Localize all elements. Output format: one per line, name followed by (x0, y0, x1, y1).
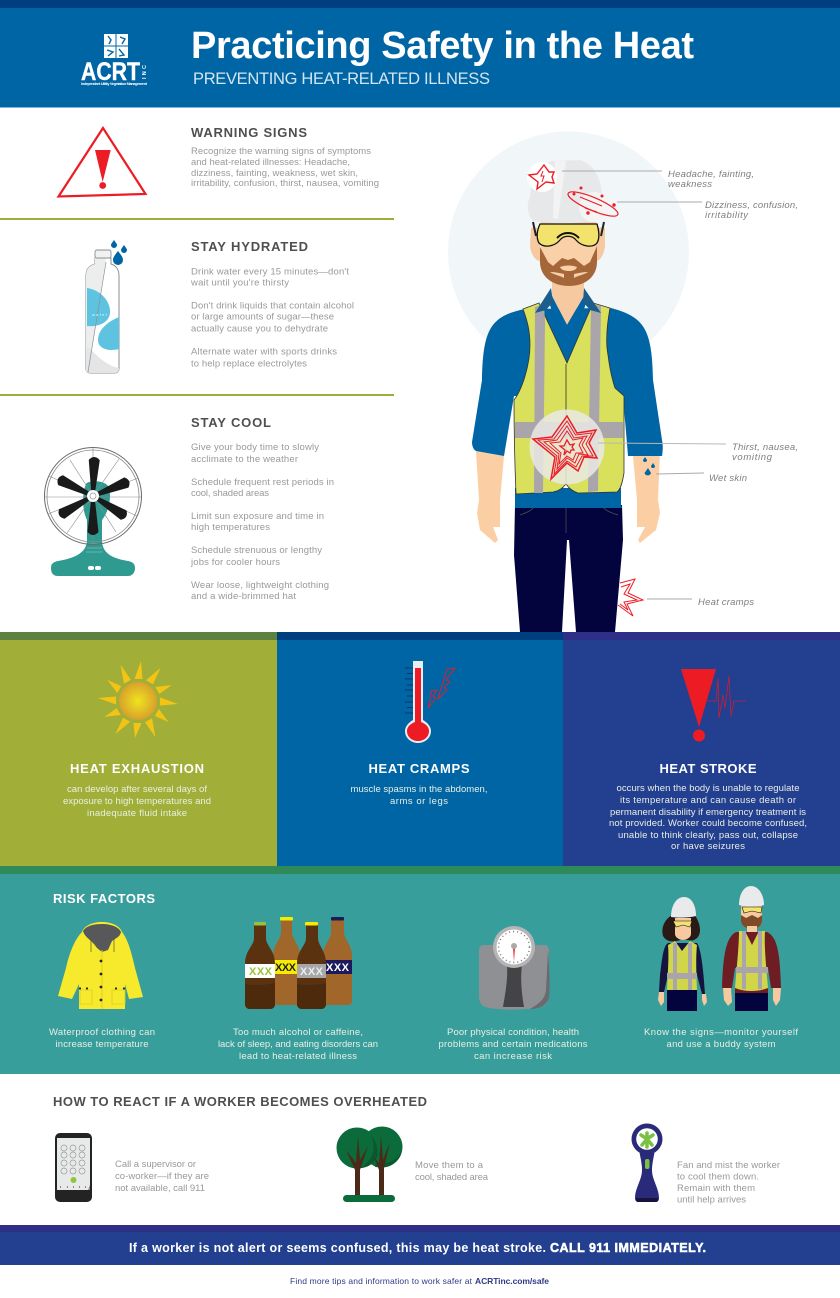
icon: sun (98, 661, 178, 738)
text: heat stroke (609, 783, 807, 852)
panel: stay hydrated: to help replace electrolytes (191, 358, 307, 370)
caption: clothing: increase temperature (56, 1039, 148, 1050)
banner: call 911 (0, 1225, 840, 1265)
icon: shade trees (336, 1126, 402, 1202)
panel: stay cool: cool, shaded areas (191, 488, 269, 499)
caption: buddy system: and use a buddy system (666, 1039, 776, 1050)
heading: risk factors: RISK FACTORS (53, 891, 155, 906)
icon: two workers (658, 886, 781, 1011)
panel: warning signs: irritability, confusion, thirst, nausea, vomiting (191, 178, 379, 189)
banner: call 911: CALL 911 IMMEDIATELY. (550, 1241, 706, 1255)
panel: stay hydrated: or large amounts of sugar—these (191, 312, 334, 322)
panel: stay hydrated: actually cause you to dehydrate (191, 324, 328, 334)
icon: bottles (245, 917, 352, 1009)
caption: alcohol (218, 1027, 378, 1062)
panel: stay cool: jobs for cooler hours (190, 557, 280, 568)
panel: stay cool: Give your body time to slowly (191, 442, 319, 453)
text: heat cramps: muscle spasms in the abdomen, (350, 784, 488, 795)
text: call supervisor: Call a supervisor or (115, 1159, 196, 1170)
callout: thirst: vomiting (732, 452, 773, 463)
text: heat exhaustion: exposure to high temperatures and (63, 796, 211, 807)
bottle front right: XXX (300, 966, 324, 978)
text: heat exhaustion: inadequate fluid intake (87, 808, 187, 819)
panel: stay hydrated: STAY HYDRATED (191, 239, 308, 254)
icon: sweat drops (643, 457, 655, 475)
caption: alcohol: lead to heat-related illness (239, 1051, 357, 1062)
panel: heat stroke (563, 632, 840, 867)
icon: raincoat (58, 922, 143, 1009)
text: heat cramps: arms or legs (390, 796, 448, 807)
caption: condition: Poor physical condition, health (447, 1027, 579, 1038)
panel: risk factors (0, 866, 840, 1074)
panel: warning signs: Recognize the warning signs of symptoms (191, 146, 371, 157)
panel: stay cool: Schedule strenuous or lengthy (191, 545, 322, 556)
heading: heat exhaustion: HEAT EXHAUSTION (70, 761, 204, 776)
panel: stay hydrated: wait until you're thirsty (190, 278, 289, 288)
caption: alcohol: Too much alcohol or caffeine, (233, 1027, 363, 1038)
woman worker (658, 897, 707, 1011)
text: heat stroke: or have seizures (671, 841, 745, 852)
panel: warning signs: WARNING SIGNS (191, 125, 307, 140)
panel: warning signs: dizziness, fainting, weakness, wet skin, (191, 168, 358, 179)
text: move them: cool, shaded area (415, 1172, 489, 1183)
bottle front left: XXX (249, 966, 273, 978)
caption: clothing: Waterproof clothing can (49, 1027, 155, 1038)
icon: leg cramp burst (618, 579, 643, 616)
panel: warning signs (191, 125, 379, 189)
callout: wet skin (656, 473, 747, 484)
text: heat exhaustion (63, 784, 211, 819)
panel: stay cool: high temperatures (191, 522, 270, 533)
icon: fan (44, 448, 142, 576)
caption: buddy system (644, 1027, 798, 1050)
subtitle: PREVENTING HEAT-RELATED ILLNESS (193, 70, 490, 88)
text: move them (415, 1160, 489, 1183)
ACRT logo: Independent Utility Vegetation Management (81, 82, 148, 86)
panel: stay cool (190, 415, 334, 602)
callout: headache (562, 169, 754, 190)
panel: heat cramps (277, 632, 563, 867)
callout: heat cramps: Heat cramps (698, 597, 754, 608)
illustration: worker with symptoms (448, 132, 689, 632)
icon: phone (55, 1133, 92, 1202)
heading: how to react: HOW TO REACT IF A WORKER BECOMES OVERHEATED (53, 1094, 427, 1109)
icon: water bottle (86, 240, 127, 373)
text: call supervisor (115, 1159, 209, 1194)
panel: warning signs: and heat-related illnesses: Headache, (191, 157, 350, 168)
panel: stay cool: Schedule frequent rest periods in (191, 477, 334, 488)
icon: scale (479, 926, 550, 1010)
icon: dizziness rings (566, 187, 620, 221)
callout: dizziness (617, 200, 798, 221)
caption: alcohol: lack of sleep, and eating disorders can (218, 1039, 378, 1050)
text: fan and mist: Remain with them (677, 1183, 755, 1194)
text: heat exhaustion: can develop after several days of (67, 784, 207, 795)
panel: stay cool: Wear loose, lightweight clothing (191, 580, 329, 591)
text: fan and mist: until help arrives (677, 1194, 746, 1206)
panel: stay hydrated: Drink water every 15 minutes—don't (191, 266, 349, 278)
callout: headache: weakness (668, 179, 712, 190)
text: heat stroke: not provided. Worker could become confused, (609, 818, 807, 829)
text: heat stroke: occurs when the body is unable to regulate (616, 783, 800, 794)
icon: exclamation and heartbeat (681, 669, 746, 742)
callout: heat cramps (647, 597, 754, 608)
banner: call 911: If a worker is not alert or seems confused, this may be heat stroke. (129, 1241, 546, 1255)
caption: condition: problems and certain medications (438, 1039, 588, 1050)
caption: clothing (49, 1027, 155, 1050)
panel: stay cool: and a wide-brimmed hat (191, 591, 296, 602)
panel: stay hydrated (190, 239, 354, 370)
callout: headache: Headache, fainting, (668, 169, 754, 180)
text: call supervisor: co-worker—if they are (115, 1171, 209, 1182)
callout: dizziness: Dizziness, confusion, (705, 200, 798, 211)
heading: heat stroke: HEAT STROKE (660, 761, 757, 776)
icon: thermometer (405, 661, 455, 743)
text: fan and mist: Fan and mist the worker (677, 1160, 780, 1171)
callout: thirst (598, 442, 798, 463)
callout: wet skin: Wet skin (709, 473, 747, 484)
ACRT logo: ACRT (81, 57, 140, 85)
icon: stomach star (533, 416, 597, 479)
bottle back right: XXX (326, 962, 350, 974)
text: fan and mist (677, 1160, 780, 1206)
callout: dizziness: irritability (705, 210, 749, 221)
icon: warning triangle (58, 128, 146, 196)
ACRT logo (81, 34, 148, 86)
ACRT logo: INC (142, 65, 148, 79)
footer: ACRTinc.com/safe (475, 1276, 549, 1286)
caption: buddy system: Know the signs—monitor yourself (644, 1027, 798, 1038)
caption: condition: can increase risk (474, 1051, 552, 1062)
panel: heat exhaustion (0, 632, 277, 867)
text: heat cramps (350, 784, 488, 807)
man worker (722, 886, 781, 1011)
icon: water bottle: water (92, 312, 108, 317)
icon: mister fan (632, 1124, 662, 1202)
panel: stay cool: STAY COOL (191, 415, 271, 430)
footer: Find more tips and information to work safer at (290, 1276, 473, 1286)
title: Practicing Safety in the Heat (191, 25, 694, 67)
text: heat stroke: permanent disability if emergency treatment is (610, 807, 806, 818)
text: heat stroke: unable to think clearly, pass out, collapse (618, 830, 798, 841)
text: call supervisor: not available, call 911 (115, 1183, 205, 1194)
bottle back left: XXX (275, 962, 297, 974)
panel: stay hydrated: Alternate water with sports drinks (191, 346, 337, 358)
text: fan and mist: to cool them down. (677, 1172, 759, 1182)
heading: heat cramps: HEAT CRAMPS (368, 761, 470, 776)
text: heat stroke: its temperature and can cause death or (620, 795, 796, 806)
caption: condition (438, 1027, 588, 1062)
text: move them: Move them to a (415, 1160, 484, 1171)
header band (0, 0, 840, 108)
panel: stay cool: acclimate to the weather (191, 454, 298, 465)
icon: headache star (529, 165, 554, 189)
callout: thirst: Thirst, nausea, (732, 442, 798, 453)
panel: stay hydrated: Don't drink liquids that contain alcohol (191, 300, 354, 312)
panel: stay cool: Limit sun exposure and time in (191, 511, 324, 522)
